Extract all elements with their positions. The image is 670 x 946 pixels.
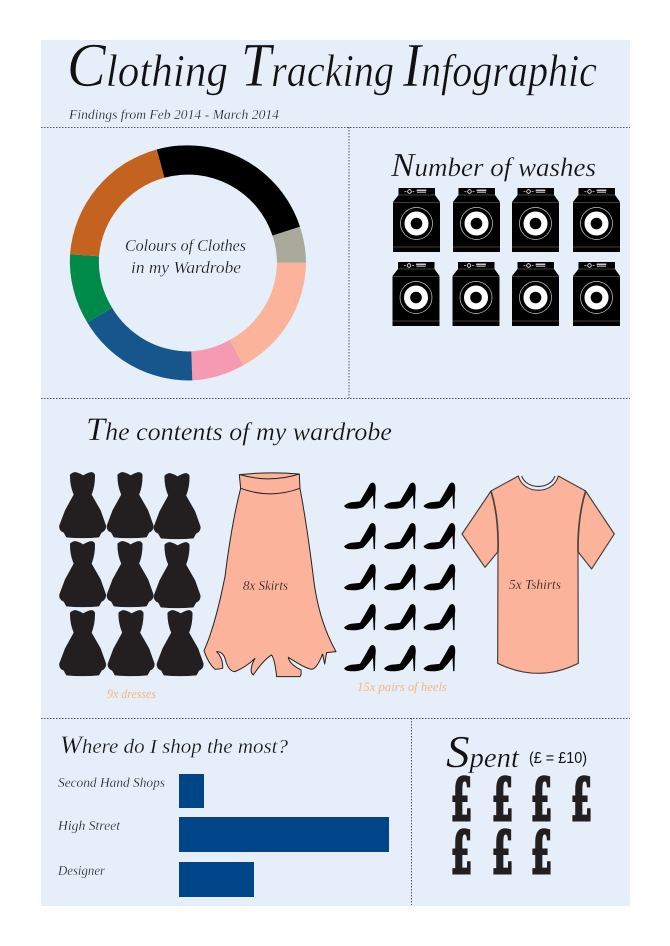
bar: high street — [57, 817, 389, 852]
donut label: in my Wardrobe — [131, 258, 241, 277]
segment: green — [70, 254, 112, 322]
subtitle: Findings from Feb 2014 - March 2014 — [68, 108, 279, 123]
icons: seven pound signs: £ — [451, 819, 472, 887]
label: heels: 15x pairs of heels — [357, 679, 447, 694]
bar: high street: High Street — [57, 819, 121, 834]
note: pound scale: (£ = £10) — [529, 750, 587, 767]
label: dresses: 9x dresses — [107, 686, 156, 701]
icon: skirt — [204, 473, 336, 677]
icon: t-shirt — [462, 476, 614, 673]
icons: eight washing machines — [392, 188, 620, 326]
title: Tracking — [241, 32, 394, 100]
label: t-shirts: 5x Tshirts — [509, 578, 562, 593]
heading: number of washes: Number of washes — [390, 147, 596, 184]
panel: where do I shop the most — [57, 732, 389, 897]
bar: second hand shops — [58, 774, 204, 808]
bar: designer — [57, 862, 254, 897]
heading: spent: Spent — [446, 726, 520, 777]
segment: black — [157, 145, 300, 236]
panel: number of washes — [390, 147, 620, 326]
title: Infographic — [402, 32, 597, 100]
segment: peach — [230, 262, 306, 365]
segment: blue — [87, 308, 192, 380]
donut label — [125, 236, 246, 277]
icons: seven pound signs: £ — [451, 766, 472, 834]
heading: where do I shop: Where do I shop the most? — [60, 732, 288, 759]
segment: pink — [191, 340, 243, 380]
bar: designer: Designer — [57, 864, 106, 879]
panel: contents of my wardrobe — [59, 412, 614, 701]
icons: seven pound signs — [451, 766, 592, 887]
heading: contents of wardrobe: The contents of my wardrobe — [86, 412, 392, 448]
donut label: Colours of Clothes — [125, 236, 246, 255]
title — [67, 32, 597, 100]
label: skirts: 8x Skirts — [243, 579, 289, 594]
icons: seven pound signs: £ — [492, 819, 513, 887]
segment: orange — [70, 150, 164, 256]
icons: nine dresses — [59, 472, 204, 676]
bar: second hand shops: Second Hand Shops — [58, 776, 166, 791]
icons: seven pound signs: £ — [571, 766, 592, 834]
panel: spent — [446, 726, 592, 887]
icons: seven pound signs: £ — [492, 766, 513, 834]
icons: fifteen pairs of heels — [344, 482, 455, 671]
icons: seven pound signs: £ — [531, 766, 552, 834]
segment: grey — [272, 227, 306, 262]
panel: colours of clothes donut chart — [70, 145, 306, 380]
icons: seven pound signs: £ — [531, 819, 552, 887]
title: Clothing — [67, 32, 228, 100]
